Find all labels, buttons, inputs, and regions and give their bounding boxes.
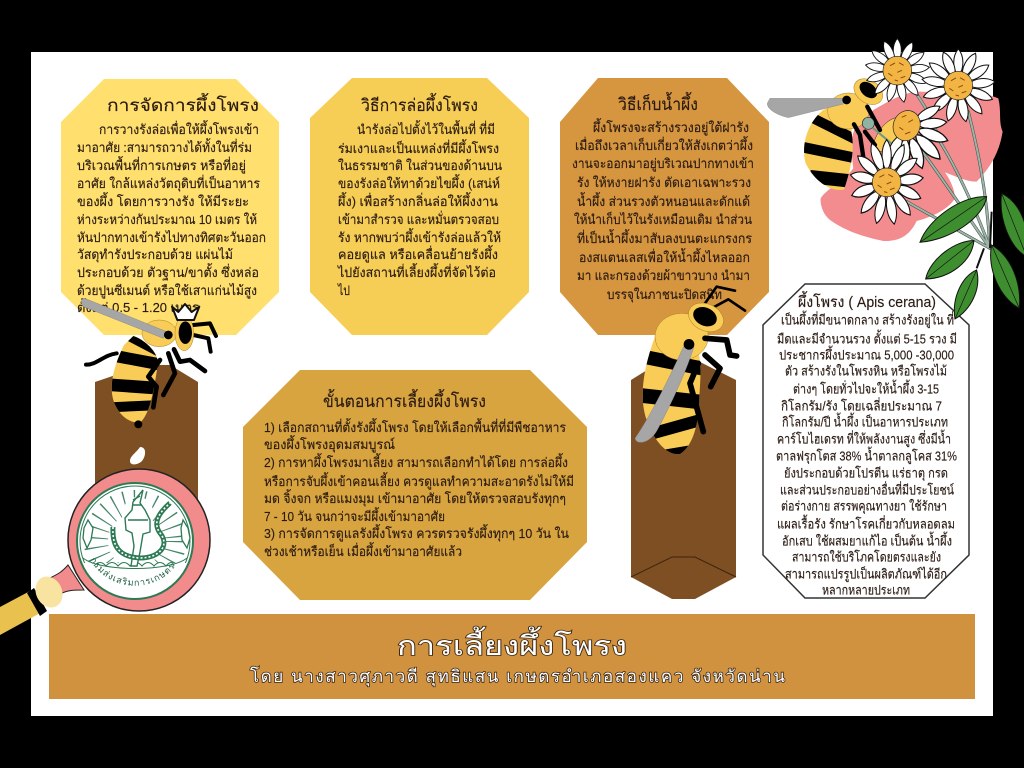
text block: rearing steps: หรือการจับผึ้งเข้าคอนเลี้ยง ควรดูแลทำความสะอาดรังไม่ให้มี [264, 472, 574, 490]
illustration: pink flowers background [821, 85, 1024, 319]
icon: foraging bee [767, 78, 896, 190]
icon: magnifier with department seal [0, 468, 211, 635]
text block: bee management: อาศัย ใกล้แหล่งวัตถุดิบที่เป็นอาหาร [77, 174, 260, 192]
text block: Apis cerana facts: กิโลกรัม/รัง โดยเฉลี่ยประมาณ 7 [781, 398, 942, 414]
text block: rearing steps: มด จิ้งจก หรือแมงมุม เข้ามาอาศัย โดยให้ตรวจสอบรังทุกๆ [264, 489, 566, 507]
text block: honey harvesting: องสแตนเลสเพื่อให้น้ำผึ้งไหลออก [579, 248, 750, 265]
text block: luring method: ในธรรมชาติ ในส่วนของด้านบน [338, 158, 502, 173]
text block: bee management: การวางรังล่อเพื่อให้ผึ้งโพรงเข้า [99, 120, 259, 137]
text block: Apis cerana facts: แผลเรื้อรัง รักษาโรคเกี่ยวกับหลอดลม [777, 514, 955, 532]
text block: bee management: มาอาศัย :สามารถวางได้ทั้งในที่ร่ม [77, 138, 252, 155]
text block: bee management: ด้วยปูนซีเมนต์ หรือใช้เสาแก่นไม้สูง [77, 283, 257, 299]
text block: rearing steps: 3) การจัดการดูแลรังผึ้งโพรง ควรตรวจรังผึ้งทุกๆ 10 วัน ใน [264, 524, 569, 542]
text block: honey harvesting: ให้นำเก็บไว้ในรังเหมือนเดิม นำส่วน [574, 210, 752, 227]
icon: white drop [130, 447, 145, 464]
panel: luring method [310, 78, 529, 335]
text block: bee management: ของผึ้ง โดยการวางรัง ให้มีระยะ [77, 192, 249, 209]
text block: Apis cerana facts: ต่างๆ โดยทั่วไปจะให้น้ำผึ้ง 3-15 [793, 380, 939, 396]
text block: luring method: ไปยังสถานที่เลี้ยงผึ้งที่จัดไว้ต่อ [337, 263, 496, 280]
text block: bee management [77, 120, 266, 315]
text block: Apis cerana facts: และส่วนประกอบอย่างอื่นที่มีประโยชน์ [780, 482, 954, 498]
text block: Apis cerana facts: หลากหลายประเภท [822, 582, 910, 598]
text block: rearing steps: ของผึ้งโพรงอุดมสมบูรณ์ [264, 435, 395, 453]
text block: luring method: ผึ้ง) เพื่อสร้างกลิ่นล่อให้ผึ้งงาน [338, 192, 498, 209]
text block: Apis cerana facts: ยังประกอบด้วยโปรตีน แร่ธาตุ กรด [784, 466, 948, 482]
magnifier handle [0, 565, 84, 635]
hive: right [631, 362, 736, 599]
text block: bee management: บริเวณพื้นที่การเกษตร หรือที่อยู่ [77, 156, 246, 174]
text block: Apis cerana facts: ประชากรผึ้งประมาณ 5,000 -30,000 [779, 346, 954, 362]
text block: Apis cerana facts: สามารถใช้บริโภคโดยตรงและยัง [792, 550, 941, 564]
heading: rearing steps: ขั้นตอนการเลี้ยงผึ้งโพรง [323, 389, 486, 411]
text block: rearing steps: 2) การหาผึ้งโพรงมาเลี้ยง สามารถเลือกทำได้โดย การล่อผึ้ง [264, 453, 568, 470]
text block: Apis cerana facts: ต่อร่างกาย สรรพคุณทางยา ใช้รักษา [781, 498, 947, 514]
text block: bee management: ตั้งแต่ 0.5 - 1.20 เมตร [77, 298, 199, 315]
panel: rearing steps [243, 370, 587, 600]
text block: luring method: ร่มเงาและเป็นแหล่งที่มีผึ้งโพรง [338, 139, 499, 156]
text block: honey harvesting: ผึ้งโพรงจะสร้างรวงอยู่ใต้ฝารัง [593, 118, 749, 136]
icon: daisy flowers [850, 38, 995, 225]
text block: luring method: เข้ามาสำรวจ และหมั่นตรวจสอบ [338, 211, 499, 227]
text block: honey harvesting: น้ำผึ้ง ส่วนรวงตัวหนอนและดักแด้ [577, 192, 750, 209]
flower stems [907, 85, 990, 248]
main title: การเลี้ยงผึ้งโพรง [397, 626, 627, 661]
hive: left [95, 365, 198, 505]
text block: Apis cerana facts: มืดและมีจำนวนรวง ตั้งแต่ 5-15 รวง มี [777, 330, 957, 346]
text block: Apis cerana facts: กิโลกรัม/ปี น้ำผึ้ง เป็นอาหารประเภท [782, 412, 948, 430]
text block: bee management: ประกอบด้วย ตัวฐาน/ขาตั้ง ซึ่งหล่อ [77, 263, 259, 281]
heading: honey harvesting: วิธีเก็บน้ำผึ้ง [618, 92, 698, 114]
text block: Apis cerana facts: ตัว สร้างรังในโพรงหิน หรือโพรงไม้ [785, 364, 947, 378]
text block: honey harvesting: ที่เป็นน้ำผึ้งมาสับลงบนตะแกรงกร [577, 229, 752, 246]
text block: luring method: ของรังล่อให้ทาด้วยไขผึ้ง (เสน่ห์ [338, 174, 500, 191]
text block: honey harvesting: บรรจุในภาชนะปิดสนิท [607, 287, 722, 303]
panel: honey harvesting [560, 78, 769, 335]
text block: Apis cerana facts: สามารถแปรรูปเป็นผลิตภัณฑ์ได้อีก [785, 564, 947, 582]
text block: Apis cerana facts: เป็นผึ้งที่มีขนาดกลาง สร้างรังอยู่ใน ที่ [781, 310, 954, 328]
text block: bee management: ห่างระหว่างกันประมาณ 10 เมตร ให้ [77, 212, 257, 227]
text block: honey harvesting: งานจะออกมาอยู่บริเวณปากทางเข้า [572, 156, 754, 172]
text block: luring method [337, 120, 502, 298]
text block: luring method: ไป [337, 283, 350, 298]
text block: bee management: หันปากทางเข้ารังไปทางทิศตะวันออก [77, 230, 266, 245]
text block: honey harvesting [572, 118, 754, 303]
panel: Apis cerana facts [763, 284, 969, 598]
icon: crown [172, 304, 199, 320]
text block: bee management: วัสดุทำรังประกอบด้วย แผ่นไม้ [77, 247, 233, 263]
text block: honey harvesting: มา และกรองด้วยผ้าขาวบาง นำมา [577, 268, 750, 283]
text block: honey harvesting: รัง ให้หงายฝารัง ตัดเอาเฉพาะรวง [577, 175, 751, 190]
text block: rearing steps: ช่วงเช้าหรือเย็น เมื่อผึ้งเข้ามาอาศัยแล้ว [264, 542, 462, 559]
heading: luring method: วิธีการล่อผึ้งโพรง [361, 93, 478, 115]
icon: worker bee [635, 287, 745, 457]
text block: Apis cerana facts: ตาลฟรุกโตส 38% น้ำตาลกลูโคส 31% [776, 446, 957, 464]
text block: Apis cerana facts: อักเสบ ใช้ผสมยาแก้ไอ เป็นต้น น้ำผึ้ง [782, 532, 952, 548]
text block: rearing steps [264, 418, 574, 559]
text block: luring method: คอยดูแล หรือเคลื่อนย้ายรังผึ้ง [338, 245, 498, 263]
author line: โดย นางสาวศุภาวดี สุทธิแสน เกษตรอำเภอสองแคว จังหวัดน่าน [250, 666, 785, 687]
panel: bee hive management [61, 79, 279, 335]
text block: Apis cerana facts: คาร์โบไฮเดรท ที่ให้พลังงานสูง ซึ่งมีน้ำ [777, 430, 951, 448]
heading: bee management: การจัดการผึ้งโพรง [107, 93, 259, 115]
text block: rearing steps: 1) เลือกสถานที่ตั้งรังผึ้งโพรง โดยให้เลือกพื้นที่ที่มีพืชอาหาร [264, 418, 566, 435]
department seal [76, 482, 194, 600]
seal lettering: กรมส่งเสริมการเกษตร [90, 558, 174, 586]
heading: Apis cerana: ผึ้งโพรง ( Apis cerana) [798, 291, 936, 311]
text block: Apis cerana facts [776, 310, 957, 598]
icon: queen bee [81, 298, 216, 428]
text block: rearing steps: 7 - 10 วัน จนกว่าจะมีผึ้งเข้ามาอาศัย [264, 507, 445, 524]
banner: title and author [49, 614, 975, 699]
leaves [920, 193, 1024, 319]
text block: luring method: นำรังล่อไปตั้งไว้ในพื้นที่ ที่มี [357, 120, 495, 137]
text block: honey harvesting: เมื่อถึงเวลาเก็บเกี่ยวให้สังเกตว่าผึ้ง [575, 136, 753, 153]
text block: luring method: รัง หากพบว่าผึ้งเข้ารังล่อแล้วให้ [338, 228, 501, 245]
